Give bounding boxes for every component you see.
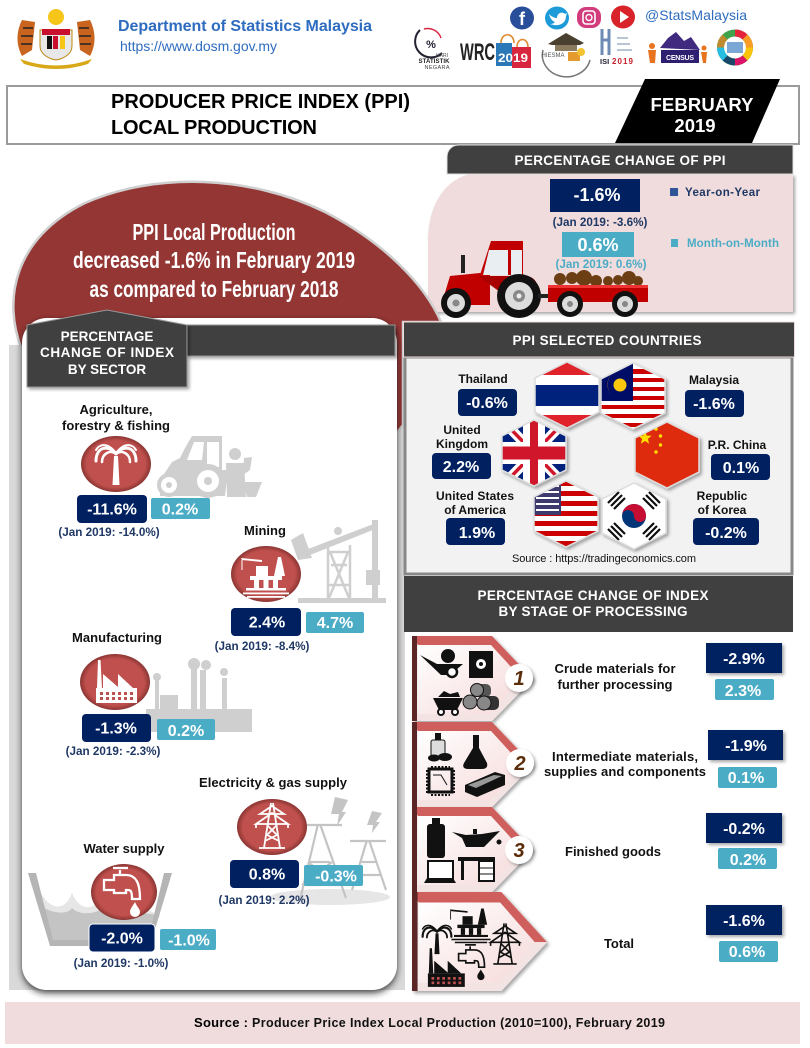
logo row: STATISTIK [418, 59, 450, 65]
United States value: United States [436, 489, 514, 503]
icons: bottle, oil can, laptop, desk [424, 818, 502, 883]
stage 4: total: -1.6% [723, 913, 765, 930]
step number: 1 [513, 668, 525, 690]
step number: 2 [513, 753, 526, 775]
stage 2: intermediate materials: 0.1% [728, 770, 764, 787]
sector: mining: 2.4% [249, 614, 285, 632]
sector: manufacturing: 0.2% [168, 723, 204, 740]
sector: manufacturing: (Jan 2019: -2.3%) [66, 745, 161, 758]
panel header [447, 145, 793, 174]
title text: PRODUCER PRICE INDEX (PPI) [111, 91, 410, 113]
United Kingdom value: Kingdom [436, 437, 488, 451]
panel: PPI selected countries [404, 322, 794, 574]
footer source [5, 1002, 800, 1044]
stage 1: crude materials [412, 636, 782, 721]
United States value: 1.9% [459, 525, 495, 542]
social handle: @StatsMalaysia [645, 7, 747, 23]
headline text [73, 219, 355, 302]
sector: agriculture [58, 402, 262, 539]
Thailand value: Thailand [458, 372, 508, 386]
sector: agriculture: forestry & fishing [62, 418, 170, 433]
year-on-year value: -1.6% [573, 185, 621, 205]
stage 3: finished goods: -0.2% [723, 821, 765, 838]
sector heading: BY SECTOR [68, 362, 146, 377]
sector heading: PERCENTAGE [61, 329, 153, 344]
sector: agriculture: 0.2% [162, 502, 198, 518]
stage 4: total: 0.6% [729, 944, 765, 961]
month-on-month value: (Jan 2019: 0.6%) [556, 258, 647, 271]
stage 1: crude materials: 2.3% [725, 683, 761, 700]
logo row [415, 28, 750, 77]
step number [505, 664, 533, 692]
logo row: CENSUS [666, 55, 694, 62]
United Kingdom value: United [443, 423, 481, 437]
United Kingdom value [432, 423, 491, 479]
countries header [404, 322, 794, 357]
logo row: HIESMA [541, 53, 565, 59]
gray tractor silhouette [159, 436, 262, 497]
month-on-month value: 0.6% [577, 235, 619, 255]
stage 4: total [412, 892, 782, 991]
Malaysia value [685, 373, 744, 417]
date badge: 2019 [674, 115, 716, 136]
China value: 0.1% [723, 460, 759, 477]
flag: Republic of Korea [601, 482, 667, 550]
flag: United States [533, 480, 599, 548]
date badge: FEBRUARY [650, 94, 754, 115]
logo row: ISI [600, 57, 609, 66]
icons: all sectors [423, 909, 519, 987]
flag: Thailand [535, 362, 599, 428]
sector: electricity and gas [199, 775, 390, 907]
logo row: 2019 [498, 51, 528, 65]
Korea value: -0.2% [705, 525, 747, 542]
sector: mining: 4.7% [317, 615, 353, 632]
gray basin [28, 873, 172, 946]
Thailand value: -0.6% [466, 395, 508, 412]
sector: manufacturing: Manufacturing [72, 630, 162, 645]
footer source: Producer Price Index Local Production (2010=100), February 2019 [252, 1016, 665, 1030]
logo row: 2019 [612, 57, 634, 66]
panel: red headline dome [13, 182, 441, 435]
sector: manufacturing: -1.3% [95, 720, 137, 738]
year-on-year value: (Jan 2019: -3.6%) [553, 216, 648, 229]
Korea value: Republic [697, 489, 748, 503]
logo row: NEGARA [424, 65, 450, 71]
headline text: as compared to February 2018 [90, 276, 339, 302]
gray band behind sector panel [9, 345, 405, 990]
Korea value [693, 489, 759, 545]
panel: percentage change of PPI [428, 145, 793, 318]
gray factory silhouette [146, 658, 252, 732]
sector: mining [215, 520, 386, 653]
flag: Malaysia [600, 362, 666, 430]
sector: water supply: -1.0% [168, 932, 210, 950]
United Kingdom value: 2.2% [443, 459, 479, 476]
panel: sector white card [22, 310, 397, 990]
year-on-year value [550, 179, 648, 229]
title text [111, 91, 410, 139]
stage 3: finished goods: Finished goods [565, 844, 661, 859]
footer source: Source : [194, 1015, 248, 1030]
stage header: BY STAGE OF PROCESSING [498, 604, 688, 619]
Thailand value [458, 372, 517, 416]
sector heading: CHANGE OF INDEX [40, 345, 174, 360]
sector: mining: (Jan 2019: -8.4%) [215, 640, 310, 653]
date badge [615, 79, 780, 143]
flag: United Kingdom [501, 419, 567, 487]
sector heading [27, 310, 187, 387]
stage 3: finished goods: 0.2% [730, 852, 766, 869]
stage 1: crude materials: Crude materials for [554, 661, 676, 676]
sector: electricity and gas: 0.8% [249, 866, 285, 884]
China value: P.R. China [708, 438, 767, 452]
social media icons: f [519, 9, 526, 29]
stage 2: intermediate materials: supplies and components [544, 764, 706, 779]
step number [505, 836, 533, 864]
gray pylons silhouette [270, 797, 390, 905]
stage 4: total: Total [604, 936, 634, 951]
panel: stage of processing [404, 576, 793, 991]
logo row: HARI [436, 53, 448, 59]
sector: agriculture: -11.6% [87, 502, 137, 518]
Korea value: of Korea [698, 503, 747, 517]
Malaysia value: Malaysia [689, 373, 739, 387]
countries header: PPI SELECTED COUNTRIES [512, 333, 702, 348]
headline text: PPI Local Production [132, 219, 296, 245]
department name: Department of Statistics Malaysia [118, 18, 372, 35]
headline text: decreased -1.6% in February 2019 [73, 247, 355, 273]
legend [670, 187, 779, 250]
sector header bar [187, 325, 395, 356]
department url: https://www.dosm.gov.my [120, 38, 277, 54]
step number [506, 749, 534, 777]
icons: wheelbarrow, barrel, cart, logs [420, 649, 499, 715]
gray oil pump silhouette [291, 520, 386, 603]
month-on-month value [556, 232, 647, 271]
stage 1: crude materials: further processing [558, 677, 673, 692]
sector: water supply [28, 841, 216, 970]
sector: mining: Mining [244, 523, 286, 538]
icon: tractor and trailer [441, 241, 648, 318]
stage header [404, 576, 793, 632]
stage header: PERCENTAGE CHANGE OF INDEX [478, 588, 708, 603]
sector: agriculture: (Jan 2019: -14.0%) [58, 526, 160, 539]
legend: Year-on-Year [685, 187, 761, 199]
stage 2: intermediate materials: -1.9% [725, 738, 767, 755]
legend: Month-on-Month [687, 238, 779, 250]
stage 2: intermediate materials: Intermediate materials, [552, 749, 698, 764]
sector: electricity and gas: -0.3% [315, 868, 357, 886]
title banner [7, 86, 799, 144]
stage 2: intermediate materials [412, 722, 783, 807]
sector: water supply: Water supply [84, 841, 165, 856]
United States value [436, 489, 514, 545]
logo row: % [426, 39, 436, 51]
logo row: WRC [460, 39, 495, 66]
icons: bottle, flask, chip, plank [427, 733, 505, 797]
sector: water supply: -2.0% [101, 930, 143, 948]
sector: manufacturing [66, 630, 252, 758]
sector: electricity and gas: Electricity & gas supply [199, 775, 348, 790]
Malaysia value: -1.6% [693, 396, 735, 413]
United States value: of America [444, 503, 506, 517]
stage 1: crude materials: -2.9% [723, 651, 765, 668]
social media icons [510, 6, 635, 30]
stage 3: finished goods [412, 807, 782, 892]
title text: LOCAL PRODUCTION [111, 117, 317, 139]
sector: water supply: (Jan 2019: -1.0%) [74, 957, 169, 970]
China value [708, 438, 770, 480]
countries source: Source : https://tradingeconomics.com [512, 553, 696, 565]
step number: 3 [513, 840, 525, 862]
sector: agriculture: Agriculture, [80, 402, 152, 417]
sector: electricity and gas: (Jan 2019: 2.2%) [219, 894, 310, 907]
panel header: PERCENTAGE CHANGE OF PPI [514, 153, 726, 168]
logo: national emblem [18, 9, 94, 69]
flag: China [634, 421, 700, 489]
